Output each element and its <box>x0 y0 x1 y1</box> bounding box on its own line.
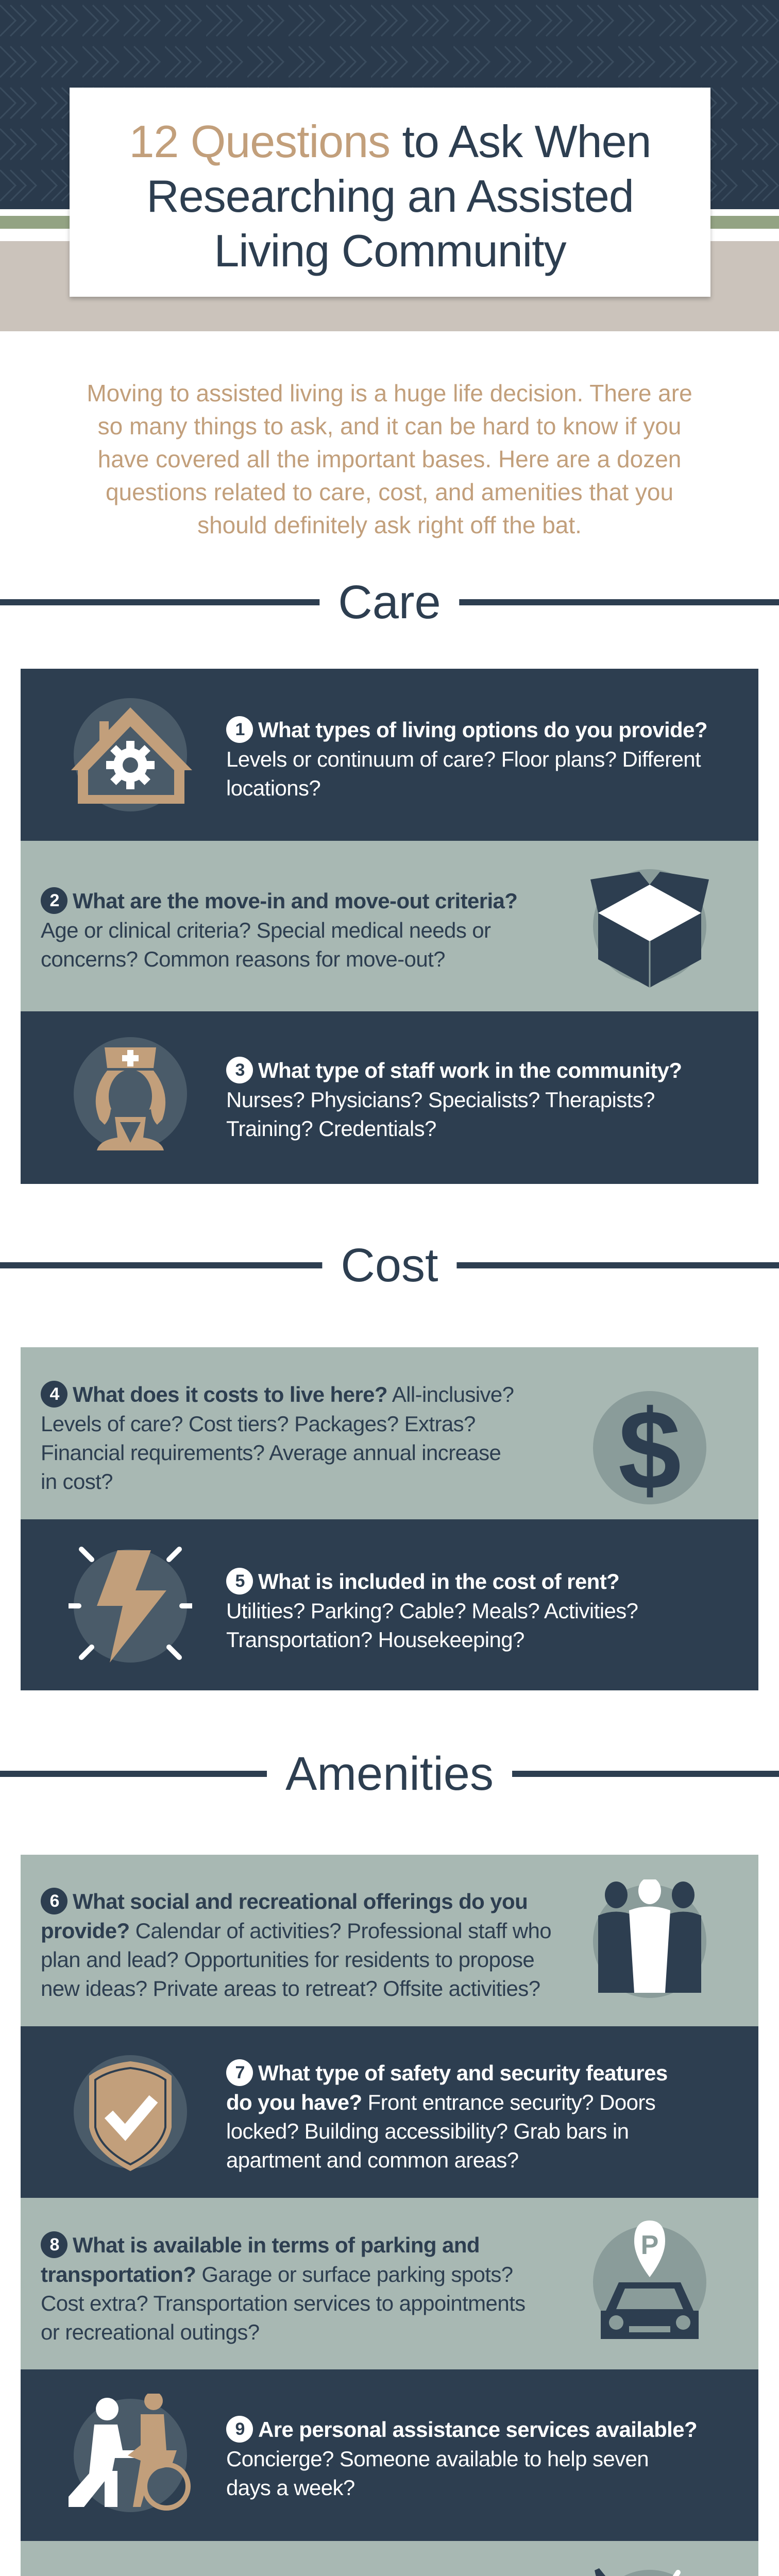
icon: open box <box>590 869 709 988</box>
text: question 1: Levels or continuum of care? Floor plans? Different <box>226 747 701 771</box>
text: question 7: apartment and common areas? <box>226 2148 518 2172</box>
text: question 9: days a week? <box>226 2476 355 2500</box>
text: question 9: Are personal assistance services available? <box>258 2417 697 2442</box>
section heading: Amenities: Amenities <box>285 1748 494 1800</box>
text: question 5: Utilities? Parking? Cable? Meals? Activities? <box>226 1599 638 1623</box>
text: question 8 <box>41 2231 526 2344</box>
text: question 1: What types of living options do you provide? <box>258 718 707 742</box>
text: question 9 <box>226 2416 697 2500</box>
text: question 4: Levels of care? Cost tiers? Packages? Extras? <box>41 1412 476 1436</box>
text: question 1: 1 <box>235 720 244 739</box>
panel 5 <box>21 1519 758 1690</box>
text: question 8: or recreational outings? <box>41 2320 260 2344</box>
text: question 3: What type of staff work in the community? <box>258 1058 682 1082</box>
panel 7 <box>21 2026 758 2198</box>
text: question 5 <box>226 1568 638 1652</box>
text: question 5: Transportation? Housekeeping? <box>226 1628 524 1652</box>
title box <box>70 88 710 297</box>
text: question 7 <box>226 2059 668 2172</box>
text: question 1: locations? <box>226 776 320 800</box>
icon: group of people <box>593 1879 706 1998</box>
text: question 3: 3 <box>235 1060 244 1080</box>
text: question 6 <box>41 1888 551 2001</box>
panel 6 <box>21 1855 758 2026</box>
text: question 2: 2 <box>50 891 58 910</box>
text: question 8: What is available in terms of parking and <box>73 2233 480 2257</box>
text: question 6: plan and lead? Opportunities for residents to propose <box>41 1947 534 1972</box>
text: question 4: in cost? <box>41 1469 113 1494</box>
section heading: Care <box>0 576 779 629</box>
icon: dollar sign: $ <box>618 1386 681 1510</box>
intro text: questions related to care, cost, and amenities that you <box>106 479 673 505</box>
title box: Researching an Assisted <box>146 171 634 222</box>
text: question 9: Concierge? Someone available to help seven <box>226 2447 649 2471</box>
title box: 12 Questions to Ask When <box>129 116 651 167</box>
panel 8 <box>21 2198 758 2369</box>
text: question 5: What is included in the cost of rent? <box>258 1569 619 1594</box>
section heading: Amenities <box>0 1748 779 1800</box>
text: question 2 <box>41 887 517 971</box>
header background <box>0 0 779 331</box>
text: question 7: What type of safety and security features <box>258 2061 668 2085</box>
text: question 8: 8 <box>50 2235 58 2255</box>
text: question 6: new ideas? Private areas to retreat? Offsite activities? <box>41 1976 540 2001</box>
text: question 6: provide? Calendar of activities? Professional staff who <box>41 1919 551 1943</box>
intro text: Moving to assisted living is a huge life decision. There are <box>87 380 692 406</box>
icon: lightning bolt <box>69 1547 192 1663</box>
text: question 2: What are the move-in and move-out criteria? <box>73 889 517 913</box>
section heading: Cost: Cost <box>341 1239 438 1292</box>
intro text <box>87 380 692 538</box>
text: question 3: Nurses? Physicians? Specialists? Therapists? <box>226 1088 655 1112</box>
icon: car with parking pin <box>593 2221 706 2339</box>
icon: knife and fork <box>595 2568 681 2576</box>
text: question 7: 7 <box>235 2063 244 2082</box>
text: question 7: locked? Building accessibility? Grab bars in <box>226 2119 629 2143</box>
text: question 8: transportation? Garage or surface parking spots? <box>41 2262 513 2286</box>
icon: shield with check <box>74 2055 187 2171</box>
panel 9 <box>21 2369 758 2541</box>
text: question 7: do you have? Front entrance security? Doors <box>226 2090 655 2114</box>
icon: nurse <box>74 1037 187 1150</box>
text: question 3: Training? Credentials? <box>226 1116 436 1141</box>
text: question 4: 4 <box>50 1384 58 1404</box>
text: question 2: concerns? Common reasons for move-out? <box>41 947 445 971</box>
text: question 9: 9 <box>235 2419 244 2439</box>
section heading: Cost <box>0 1239 779 1292</box>
panel 1 <box>21 669 758 841</box>
section heading: Care: Care <box>338 576 441 629</box>
text: question 3 <box>226 1057 682 1141</box>
icon: caregiver with wheelchair <box>69 2394 191 2512</box>
panel 10 <box>21 2541 758 2576</box>
text: question 4 <box>41 1381 514 1494</box>
text: question 1 <box>226 716 707 800</box>
text: question 8: Cost extra? Transportation services to appointments <box>41 2291 526 2315</box>
panel 3 <box>21 1011 758 1184</box>
text: question 5: 5 <box>235 1571 244 1591</box>
intro text: should definitely ask right off the bat. <box>197 512 582 538</box>
panel 2 <box>21 841 758 1011</box>
intro text: have covered all the important bases. Here are a dozen <box>98 446 681 472</box>
icon: house with gear <box>71 698 192 811</box>
panel 4 <box>21 1347 758 1519</box>
text: question 4: What does it costs to live here? All-inclusive? <box>73 1382 514 1406</box>
text: question 4: Financial requirements? Average annual increase <box>41 1440 501 1465</box>
intro text: so many things to ask, and it can be hard to know if you <box>98 413 681 439</box>
icon: dollar sign <box>593 1386 706 1510</box>
text: question 6: 6 <box>50 1891 58 1911</box>
text: question 6: What social and recreational offerings do you <box>73 1889 528 1913</box>
title box: Living Community <box>214 225 566 276</box>
icon: car with parking pin: P <box>641 2230 658 2260</box>
text: question 2: Age or clinical criteria? Special medical needs or <box>41 918 490 942</box>
